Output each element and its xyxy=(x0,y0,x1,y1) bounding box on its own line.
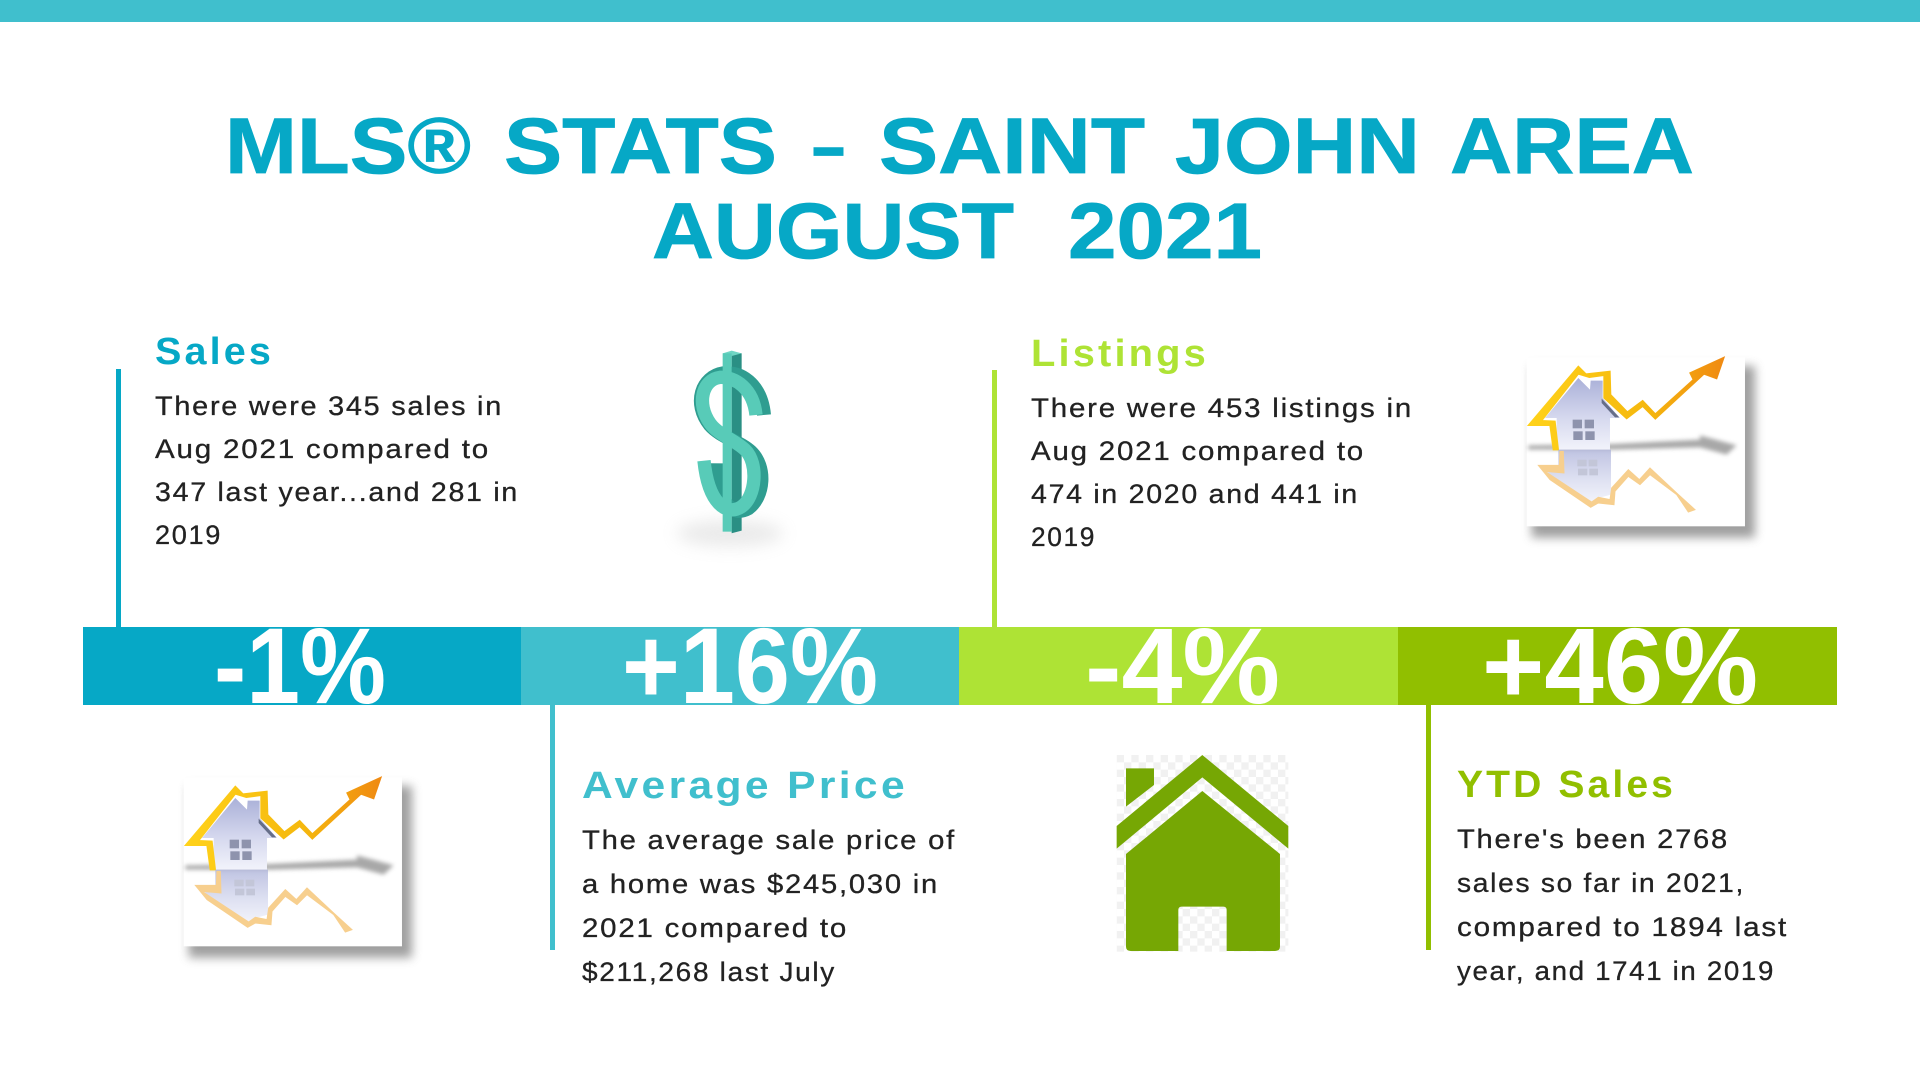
title: SAINT xyxy=(879,101,1145,190)
heading: sales: Sales xyxy=(155,331,274,373)
title: 2021 xyxy=(1068,186,1262,275)
title: JOHN xyxy=(1175,101,1420,190)
text block: ytd sales description: There's been 2768 xyxy=(1457,824,1729,854)
text block: ytd sales description xyxy=(1457,824,1788,986)
text block: sales description xyxy=(155,391,519,550)
stat: average price change: +16% xyxy=(622,605,878,726)
icon: dollar sign xyxy=(677,351,783,547)
text block: listings description xyxy=(1031,393,1413,552)
stat: sales change xyxy=(83,605,521,726)
text block: sales description: 347 last year...and 281 in xyxy=(155,477,519,507)
stat: average price change xyxy=(521,605,959,726)
panel: listings xyxy=(992,333,1413,627)
text block: listings description: Aug 2021 compared to xyxy=(1031,436,1365,466)
title: AREA xyxy=(1450,101,1694,190)
title: – xyxy=(812,101,845,190)
text block: sales description: Aug 2021 compared to xyxy=(155,434,490,464)
stat: ytd sales change: +46% xyxy=(1482,605,1758,726)
text block: sales description: 2019 xyxy=(155,520,222,550)
top accent bar xyxy=(0,0,1920,22)
text block: listings description: 474 in 2020 and 441 in xyxy=(1031,479,1359,509)
text block: ytd sales description: year, and 1741 in 2019 xyxy=(1457,956,1775,986)
icon: house with rising arrow (sales) xyxy=(184,777,412,958)
stat band xyxy=(83,605,1837,726)
text block: listings description: 2019 xyxy=(1031,522,1096,552)
title: STATS xyxy=(504,101,777,190)
stat: ytd sales change xyxy=(1398,605,1837,726)
panel: average price xyxy=(550,705,956,987)
text block: ytd sales description: compared to 1894 last xyxy=(1457,912,1788,942)
stat: listings change: -4% xyxy=(1085,605,1280,726)
icon: green house xyxy=(1117,755,1288,952)
heading: ytd sales: YTD Sales xyxy=(1457,764,1676,806)
panel: ytd sales xyxy=(1426,705,1788,986)
text block: sales description: There were 345 sales in xyxy=(155,391,503,421)
panel: sales xyxy=(116,331,519,627)
text block: ytd sales description: sales so far in 2021, xyxy=(1457,868,1745,898)
title xyxy=(225,101,1694,275)
title: MLS® xyxy=(225,101,471,190)
text block: listings description: There were 453 listings in xyxy=(1031,393,1413,423)
stat: listings change xyxy=(959,605,1398,726)
text block: average price description xyxy=(582,825,956,987)
title: AUGUST xyxy=(652,186,1014,275)
stat: sales change: -1% xyxy=(214,605,386,726)
text block: average price description: a home was $245,030 in xyxy=(582,869,939,899)
heading: average price: Average Price xyxy=(582,765,908,807)
text block: average price description: 2021 compared to xyxy=(582,913,848,943)
icon: house with rising arrow (listings) xyxy=(1527,357,1755,538)
heading: listings: Listings xyxy=(1031,333,1209,375)
text block: average price description: The average sale price of xyxy=(582,825,956,855)
text block: average price description: $211,268 last July xyxy=(582,957,836,987)
